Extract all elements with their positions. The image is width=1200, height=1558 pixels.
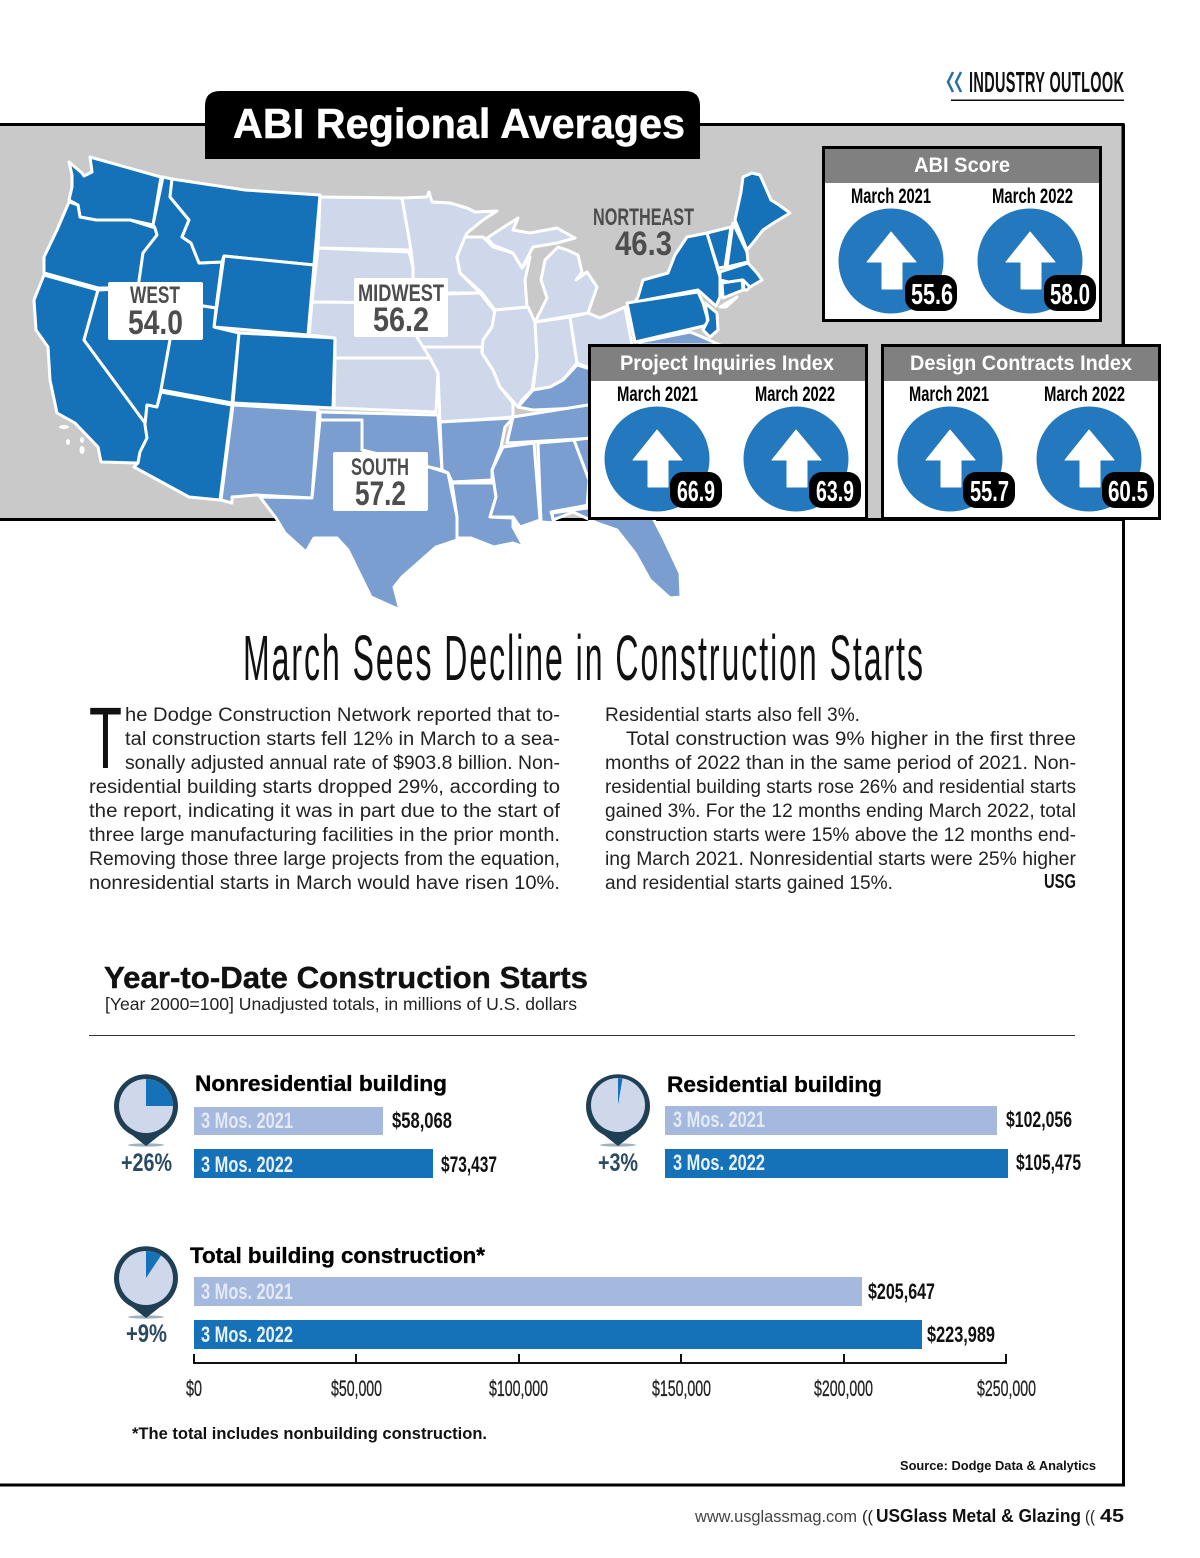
panel: Design Contracts Index: March 2021 <box>909 383 989 406</box>
region: midwest states <box>309 192 632 422</box>
chart axis <box>186 1354 1036 1401</box>
chart: total building construction: $223,989 <box>927 1322 995 1347</box>
panel: Project Inquiries Index: Project Inquiries Index <box>620 352 834 375</box>
section header: industry outlook: INDUSTRY OUTLOOK <box>969 65 1124 98</box>
chart axis: $150,000 <box>652 1376 711 1401</box>
label: west: 54.0 <box>128 304 183 342</box>
icon: up arrow March 2021 <box>898 406 1015 512</box>
icon: up arrow March 2021: 55.7 <box>970 476 1009 508</box>
chart: residential building: 3 Mos. 2022 <box>673 1150 765 1175</box>
article text: left column: he Dodge Construction Network reported that to- <box>125 705 560 726</box>
panel: ABI Score: March 2022 <box>992 185 1073 208</box>
chart axis: $0 <box>186 1376 202 1401</box>
article text: right column: residential building starts rose 26% and residential starts <box>605 777 1076 798</box>
article heading: March Sees Decline in Construction Starts <box>243 622 923 694</box>
page footer: (( <box>1085 1507 1095 1526</box>
article text: right column: ing March 2021. Nonresidential starts were 25% higher <box>605 849 1077 870</box>
panel: Design Contracts Index: Design Contracts Index <box>910 352 1132 375</box>
region: south states <box>221 332 720 610</box>
chart: total building construction: +9% <box>126 1320 167 1348</box>
article text: right column: and residential starts gained 15%. <box>605 873 893 894</box>
title banner <box>205 91 700 159</box>
panel: gray map background <box>0 124 1123 520</box>
icon: gauge +26% <box>114 1074 178 1147</box>
icon: up arrow March 2022 <box>978 208 1096 314</box>
icon: up arrow March 2022: 60.5 <box>1108 476 1148 508</box>
label: northeast <box>593 204 694 263</box>
panel: ABI Score: ABI Score <box>914 154 1010 177</box>
label: south <box>333 452 428 513</box>
chart: residential building: Residential building <box>667 1072 882 1097</box>
panel: Project Inquiries Index <box>590 346 866 518</box>
article text: left column: the report, indicating it was in part due to the start of <box>89 801 561 822</box>
chart: residential building: 3 Mos. 2021 <box>673 1107 765 1132</box>
article text: left column: residential building starts dropped 29%, according to <box>89 777 560 798</box>
chart: residential building: $102,056 <box>1006 1107 1072 1132</box>
icon: up arrow March 2022: 63.9 <box>816 476 854 508</box>
label: south: SOUTH <box>351 454 409 481</box>
icon: gauge +3% <box>586 1074 650 1147</box>
page footer: USGlass Metal & Glazing <box>876 1506 1081 1526</box>
label: northeast: NORTHEAST <box>593 204 694 231</box>
label: midwest <box>354 278 448 339</box>
chart axis: $50,000 <box>331 1376 382 1401</box>
chart axis: $200,000 <box>814 1376 873 1401</box>
icon: up arrow March 2021 <box>838 208 957 314</box>
article text: right column: Residential starts also fell 3%. <box>605 705 860 726</box>
page footer: 45 <box>1100 1506 1124 1526</box>
source: Source: Dodge Data & Analytics <box>900 1459 1096 1473</box>
map: United States regions <box>34 157 790 610</box>
panel: ABI Score: March 2021 <box>851 185 931 208</box>
chart: total building construction: 3 Mos. 2022 <box>201 1322 293 1347</box>
chart: nonresidential building: $58,068 <box>392 1108 452 1133</box>
article text: left column <box>89 690 561 894</box>
label: midwest: MIDWEST <box>358 280 444 307</box>
chart heading <box>89 960 1075 1036</box>
chart: nonresidential building: 3 Mos. 2021 <box>201 1108 293 1133</box>
chart: nonresidential building: 3 Mos. 2022 <box>201 1152 293 1177</box>
icon: gauge +9% <box>114 1246 178 1319</box>
chart: nonresidential building: Nonresidential building <box>195 1071 447 1096</box>
chart: residential building: $105,475 <box>1016 1150 1081 1175</box>
icon: up arrow March 2021 <box>604 406 722 512</box>
icon: up arrow March 2022 <box>744 406 861 512</box>
article text: left column: nonresidential starts in March would have risen 10%. <box>89 873 560 894</box>
article text: right column: months of 2022 than in the same period of 2021. Non- <box>605 753 1076 774</box>
chart: total building construction <box>114 1243 995 1349</box>
panel: Project Inquiries Index: March 2022 <box>755 383 835 406</box>
chart: nonresidential building: $73,437 <box>441 1152 497 1177</box>
article text: right column: construction starts were 15% above the 12 months end- <box>605 825 1076 846</box>
icon: up arrow March 2021: 66.9 <box>677 476 715 508</box>
article text: right column <box>605 705 1077 894</box>
chart: nonresidential building: +26% <box>121 1149 172 1177</box>
chart heading: [Year 2000=100] Unadjusted totals, in millions of U.S. dollars <box>105 994 577 1014</box>
chart: total building construction: $205,647 <box>868 1279 935 1304</box>
chart heading: Year-to-Date Construction Starts <box>104 960 588 995</box>
article text: right column: gained 3%. For the 12 months ending March 2022, total <box>605 801 1076 822</box>
chart axis: $250,000 <box>977 1376 1036 1401</box>
panel: Design Contracts Index <box>882 346 1160 518</box>
chart: total building construction: Total building construction* <box>190 1243 485 1268</box>
chart: residential building: +3% <box>598 1149 638 1177</box>
label: south: 57.2 <box>355 475 406 513</box>
icon: up arrow March 2022 <box>1036 406 1154 512</box>
article text: left column: three large manufacturing facilities in the prior month. <box>89 825 560 846</box>
icon: up arrow March 2021: 55.6 <box>911 279 953 311</box>
region: west states <box>34 157 335 500</box>
panel: Project Inquiries Index: March 2021 <box>617 383 698 406</box>
label: west: WEST <box>130 282 180 309</box>
map islands <box>59 425 84 454</box>
label: midwest: 56.2 <box>373 301 429 339</box>
article text: right column: USG <box>1044 871 1076 893</box>
footnote: *The total includes nonbuilding construction. <box>132 1425 487 1443</box>
chart: residential building <box>586 1072 1081 1178</box>
label: northeast: 46.3 <box>615 225 672 263</box>
article text: left column: tal construction starts fell 12% in March to a sea- <box>125 729 560 750</box>
page footer: www.usglassmag.com <box>694 1507 857 1526</box>
chart: total building construction: 3 Mos. 2021 <box>201 1279 293 1304</box>
article text: left column: Removing those three large projects from the equation, <box>89 849 560 870</box>
page footer <box>694 1506 1124 1526</box>
article text: left column: sonally adjusted annual rate of $903.8 billion. Non- <box>125 753 560 774</box>
panel: Design Contracts Index: March 2022 <box>1044 383 1125 406</box>
title banner: ABI Regional Averages <box>233 100 685 147</box>
article text: right column: Total construction was 9% higher in the first three <box>626 729 1076 750</box>
region: northeast states <box>627 173 790 342</box>
article text: left column: T <box>89 690 122 787</box>
page footer: (( <box>862 1507 873 1526</box>
icon: up arrow March 2022: 58.0 <box>1050 279 1090 311</box>
label: west <box>108 282 203 342</box>
chart: nonresidential building <box>114 1071 497 1178</box>
chart axis: $100,000 <box>489 1376 548 1401</box>
panel: ABI Score <box>824 148 1100 320</box>
